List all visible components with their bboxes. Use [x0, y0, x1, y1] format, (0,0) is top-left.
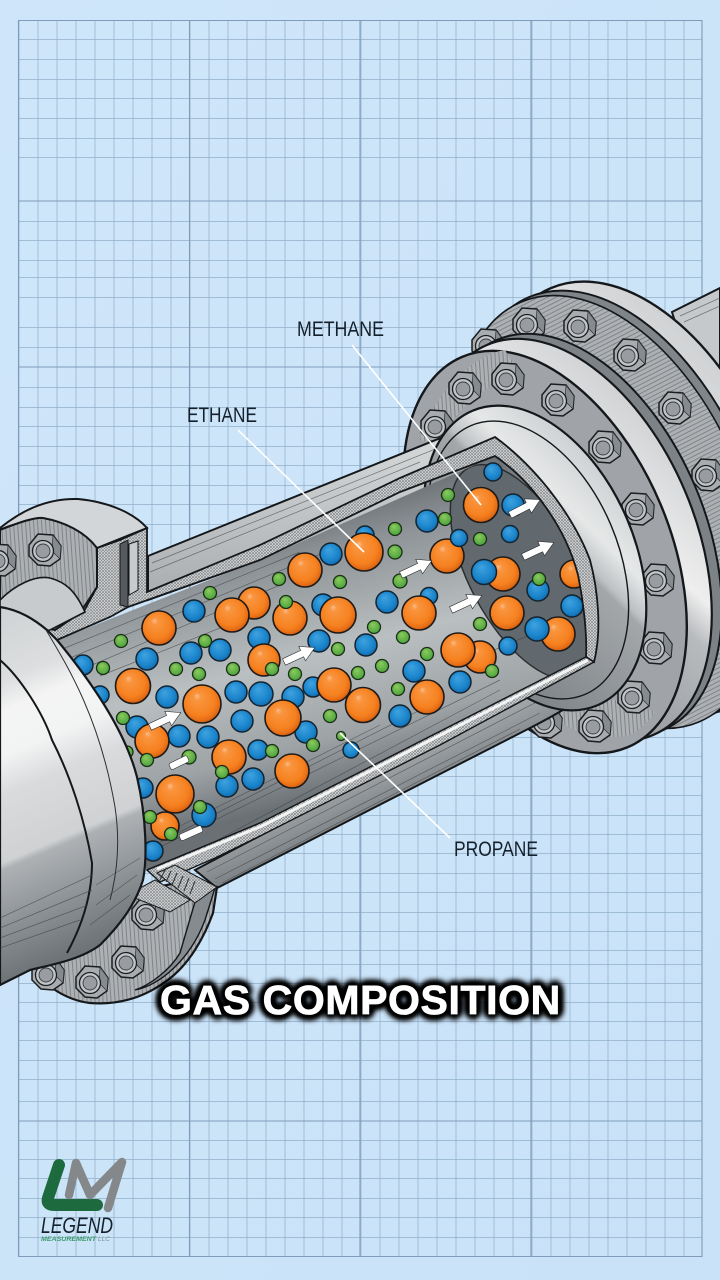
label: propane: PROPANE: [454, 838, 538, 861]
big left cylinder: [0, 607, 145, 985]
label: ethane: ETHANE: [187, 404, 257, 427]
flange gasket: [120, 540, 138, 607]
label: methane: METHANE: [297, 318, 384, 341]
right back flange: [397, 235, 720, 775]
back pipe section: [672, 288, 720, 420]
logo: Legend Measurement LLC: [41, 1162, 122, 1243]
top left flange: [0, 499, 147, 640]
label: propane: [340, 733, 538, 861]
logo: Legend Measurement LLC: LLC: [98, 1237, 111, 1243]
flow arrows: [147, 492, 557, 841]
blue molecules, back layer: [73, 463, 583, 861]
cut wall stipple band: [47, 437, 598, 662]
green molecules: [96, 488, 546, 840]
logo: Legend Measurement LLC: MEASUREMENT: [41, 1237, 98, 1243]
bottom left flange: [32, 865, 217, 1003]
pipe wall detail lines: [150, 425, 560, 883]
lower cut wall stipple band: [147, 657, 594, 882]
interior surface: [58, 457, 548, 870]
right front flange with bolts: [347, 291, 720, 796]
label: methane: [297, 318, 481, 505]
pipe interior with gas molecules: [58, 457, 586, 870]
title: GAS COMPOSITION: [160, 977, 561, 1023]
lower flange section: [127, 865, 217, 912]
blue molecules, front layer: [450, 530, 549, 641]
pipe hub: [380, 372, 690, 744]
interior shading lines: [60, 546, 590, 860]
interior end ellipse: [450, 464, 586, 676]
logo: Legend Measurement LLC: LEGEND: [41, 1213, 113, 1238]
orange molecules: [116, 488, 588, 840]
label: ethane: [187, 404, 364, 552]
lower pipe wall: [195, 660, 610, 888]
upper pipe wall: [148, 416, 530, 600]
